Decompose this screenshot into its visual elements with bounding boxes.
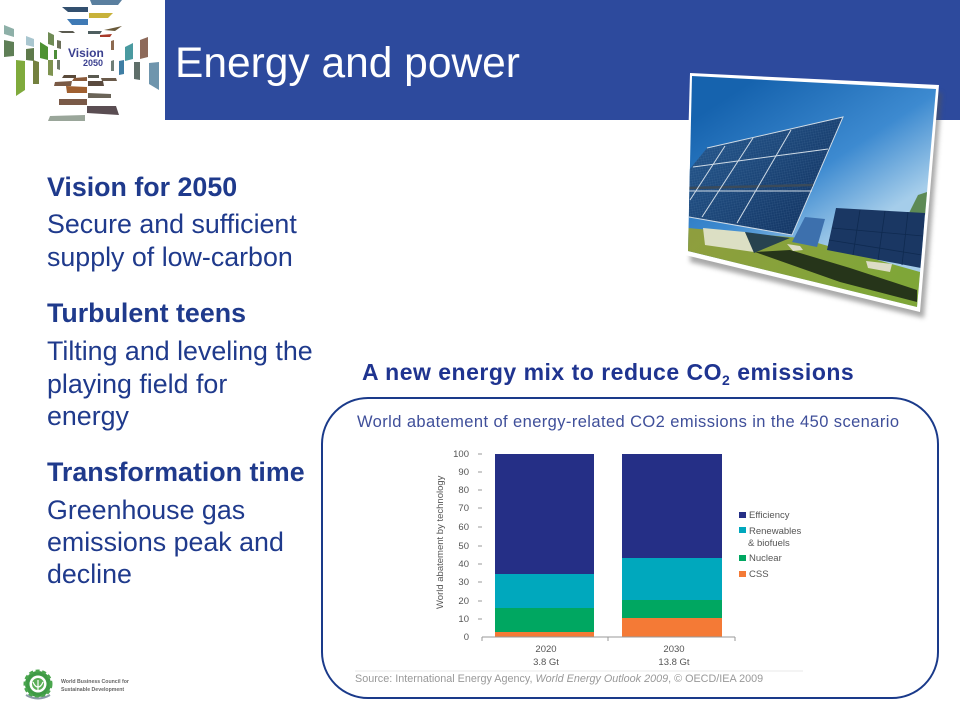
y axis labels: 10 xyxy=(458,614,469,625)
y axis labels: 70 xyxy=(458,503,469,514)
y axis labels: 80 xyxy=(458,485,469,496)
legend: Renewables xyxy=(749,526,802,537)
logo: WBCSD: Sustainable Development xyxy=(61,687,124,693)
y axis labels: 0 xyxy=(464,632,469,643)
y axis labels: 30 xyxy=(458,577,469,588)
y axis labels: 100 xyxy=(453,449,469,460)
legend: Nuclear xyxy=(749,553,782,564)
legend: & biofuels xyxy=(748,538,790,549)
text: Vision for 2050 xyxy=(47,172,297,272)
text: Turbulent teens: playing field for xyxy=(47,369,227,399)
bar: 2030 xyxy=(622,454,722,637)
photo: solar panels xyxy=(680,70,945,318)
legend: Efficiency xyxy=(749,510,790,521)
chart heading: emissions xyxy=(730,359,854,385)
text: Vision for 2050: Vision for 2050 xyxy=(47,172,237,202)
logo: WBCSD: World Business Council for xyxy=(61,679,129,685)
legend: CSS xyxy=(749,569,769,580)
y axis labels: 60 xyxy=(458,522,469,533)
x axis labels: 2030 xyxy=(663,644,685,655)
text: Transformation time: Transformation time xyxy=(47,457,305,487)
legend xyxy=(739,510,802,580)
y axis labels: 90 xyxy=(458,467,469,478)
icon: gear leaf xyxy=(25,671,51,698)
chart heading: 2 xyxy=(722,372,730,388)
source line: Source: International Energy Agency, World Energy Outlook 2009, © OECD/IEA 2009 xyxy=(355,673,763,685)
logo: Vision 2050 xyxy=(4,0,159,121)
text: Transformation time: Greenhouse gas xyxy=(47,495,245,525)
panel: chart container xyxy=(322,398,938,698)
logo: Vision 2050: 2050 xyxy=(83,58,103,68)
y axis labels: 50 xyxy=(458,541,469,552)
y axis labels: 40 xyxy=(458,559,469,570)
title: Energy and power xyxy=(175,40,520,87)
chart heading: A new energy mix to reduce CO xyxy=(362,359,722,385)
text: Turbulent teens: energy xyxy=(47,401,130,431)
x axis labels xyxy=(533,644,690,668)
text: Turbulent teens: Turbulent teens xyxy=(47,298,246,328)
header band xyxy=(165,0,960,120)
text: Transformation time: decline xyxy=(47,559,132,589)
y axis labels xyxy=(453,449,469,643)
x axis labels: 3.8 Gt xyxy=(533,657,559,668)
logo: Vision 2050: Vision xyxy=(68,46,104,60)
text: Transformation time xyxy=(47,457,305,589)
text: Vision for 2050: supply of low-carbon xyxy=(47,242,293,272)
text: Turbulent teens: Tilting and leveling the xyxy=(47,336,313,366)
text: Turbulent teens xyxy=(47,298,313,431)
x axis labels: 13.8 Gt xyxy=(658,657,690,668)
stacked bar chart xyxy=(435,449,802,668)
bar: 2020 xyxy=(495,454,594,637)
chart subtitle: World abatement of energy-related CO2 emissions in the 450 scenario xyxy=(357,413,899,431)
y axis title: World abatement by technology xyxy=(435,475,446,609)
x axis labels: 2020 xyxy=(535,644,557,655)
y axis labels: 20 xyxy=(458,596,469,607)
logo: WBCSD xyxy=(25,671,129,698)
text: Vision for 2050: Secure and sufficient xyxy=(47,209,297,239)
text: Transformation time: emissions peak and xyxy=(47,527,284,557)
